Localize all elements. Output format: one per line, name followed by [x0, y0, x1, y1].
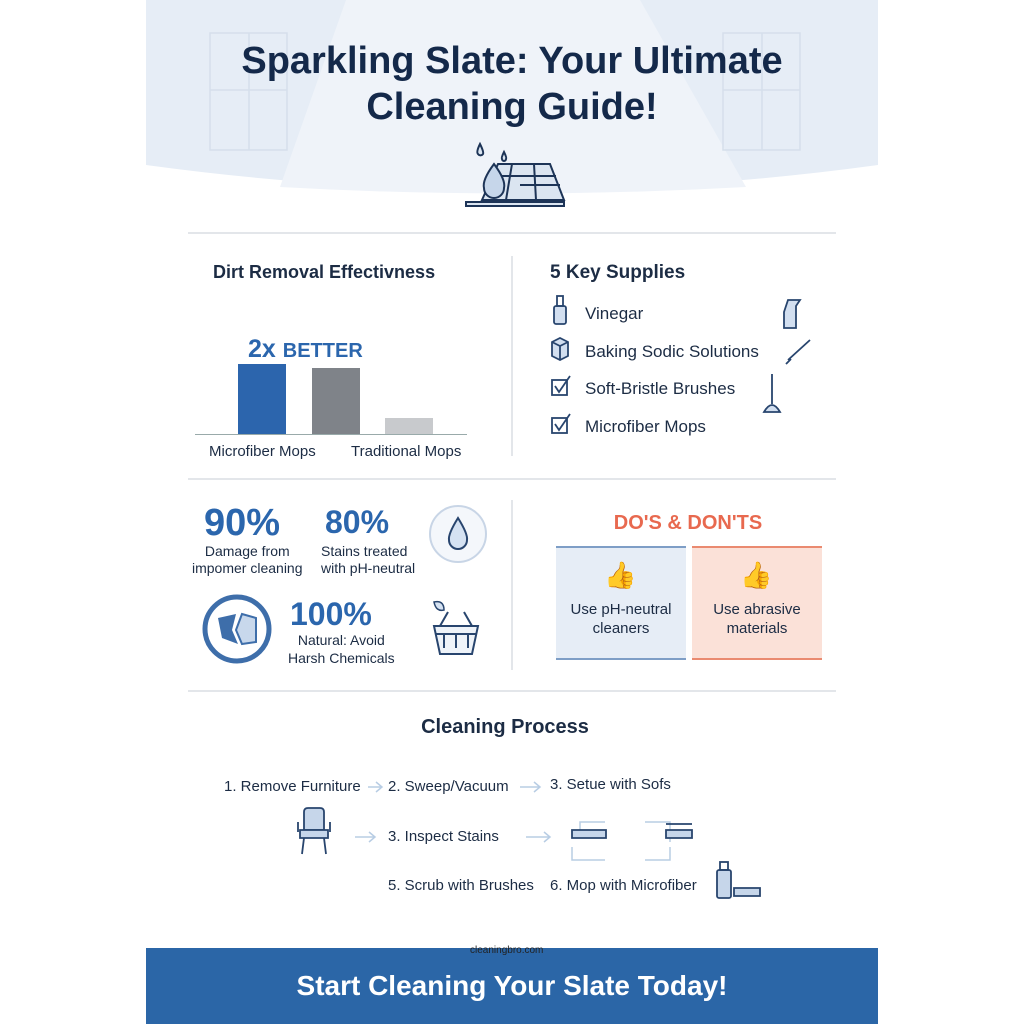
process flow [224, 776, 761, 899]
card: don't [692, 546, 822, 660]
panel: statistics [192, 502, 487, 666]
panel: key supplies: 5 Key Supplies [550, 262, 685, 283]
panel: statistics: Stains treated [321, 543, 407, 559]
panel: statistics: Damage from [205, 543, 290, 559]
icon: water drop [429, 505, 487, 563]
footer banner [146, 948, 878, 1024]
process flow: 1. Remove Furniture [224, 778, 361, 795]
icon: slate tile with drop [465, 142, 566, 207]
list [585, 304, 759, 436]
process flow: 2. Sweep/Vacuum [388, 778, 509, 795]
process flow: 6. Mop with Microfiber [550, 877, 697, 894]
list: Soft-Bristle Brushes [585, 379, 735, 398]
icon: broken tile [202, 594, 272, 664]
bar chart [195, 364, 467, 435]
panel: statistics: with pH-neutral [321, 560, 415, 576]
process flow: 5. Scrub with Brushes [388, 877, 534, 894]
card: don't: Use abrasive [713, 601, 801, 618]
card: do [556, 546, 686, 660]
title [241, 40, 783, 128]
card: do: Use pH-neutral [571, 601, 671, 618]
card: don't: 👍 [740, 560, 772, 590]
card: do: cleaners [593, 620, 649, 637]
panel: dirt removal chart: Traditional Mops [351, 443, 461, 460]
panel: do's and don'ts [556, 512, 822, 660]
panel: statistics: 80% [325, 504, 389, 540]
list: Microfiber Mops [585, 416, 706, 436]
list: Baking Sodic Solutions [585, 342, 759, 360]
heading: cleaning process: Cleaning Process [421, 716, 589, 738]
panel: key supplies [550, 262, 810, 436]
header background [146, 0, 878, 194]
title: Cleaning Guide! [366, 86, 658, 128]
panel: statistics: Natural: Avoid [298, 632, 385, 648]
card: do: 👍 [604, 560, 636, 590]
list: Vinegar [585, 304, 643, 323]
process flow: 3. Inspect Stains [388, 828, 499, 845]
panel: statistics: 100% [290, 596, 372, 632]
panel: statistics: Harsh Chemicals [288, 650, 395, 666]
panel: dirt removal chart: Microfiber Mops [209, 443, 316, 460]
panel: do's and don'ts: DO'S & DON'TS [614, 512, 762, 534]
watermark text: cleaningbro.com [470, 945, 543, 956]
callout: 2x better: 2x BETTER [248, 335, 363, 363]
title: Sparkling Slate: Your Ultimate [241, 40, 783, 82]
footer banner: Start Cleaning Your Slate Today! [297, 970, 727, 1001]
heading: Dirt Removal Effectivness [213, 262, 435, 282]
card: don't: materials [727, 620, 787, 637]
process flow: 3. Setue with Sofs [550, 776, 671, 793]
panel: dirt removal chart [195, 262, 467, 460]
panel: statistics: 90% [204, 502, 280, 544]
icon: basket [432, 600, 480, 655]
panel: statistics: impomer cleaning [192, 560, 302, 576]
